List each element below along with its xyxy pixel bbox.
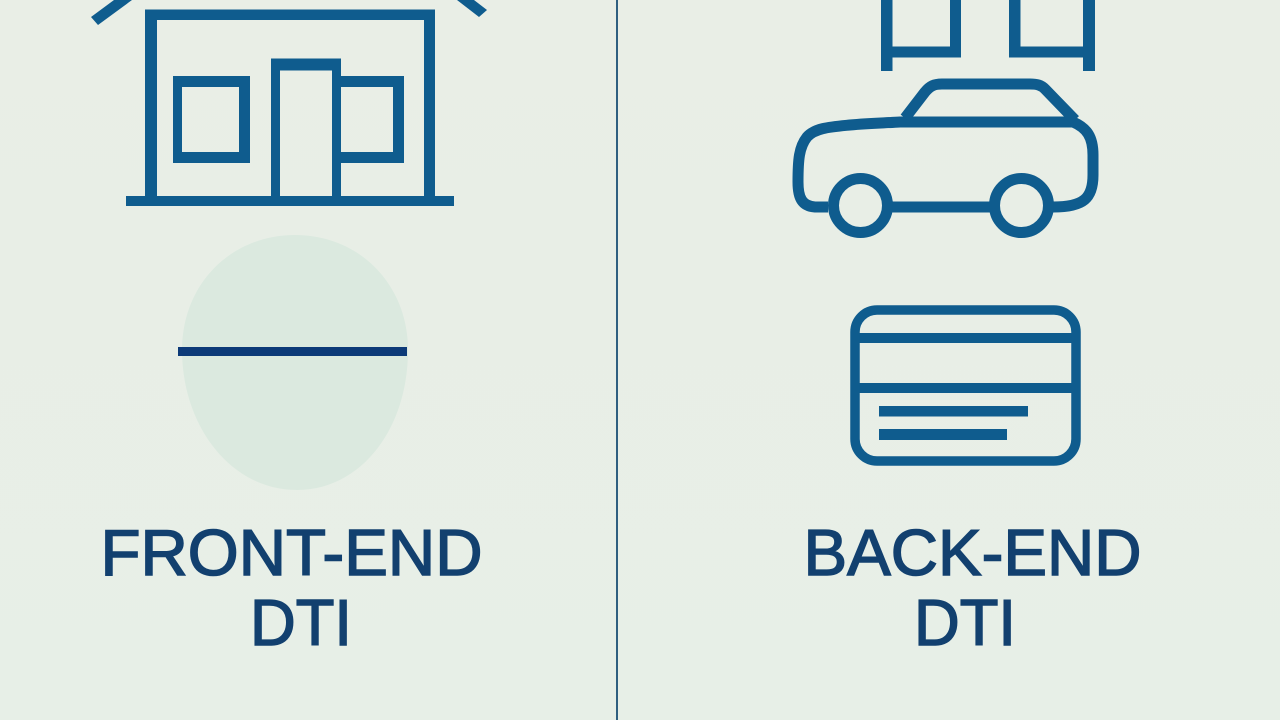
heading: front-end DTI bbox=[100, 516, 482, 659]
heading: front-end DTI: FRONT-END bbox=[100, 516, 482, 589]
icon: car bbox=[798, 84, 1093, 232]
heading: back-end DTI bbox=[804, 516, 1142, 659]
icon: credit card bbox=[855, 310, 1076, 461]
center divider bbox=[616, 0, 618, 720]
icon: pale circle with minus line bbox=[178, 235, 408, 490]
heading: back-end DTI: BACK-END bbox=[804, 516, 1142, 589]
heading: back-end DTI: DTI bbox=[914, 586, 1016, 659]
heading: front-end DTI: DTI bbox=[250, 586, 352, 659]
icon: house bbox=[91, 0, 487, 206]
icon: building fragment bbox=[881, 0, 1095, 71]
